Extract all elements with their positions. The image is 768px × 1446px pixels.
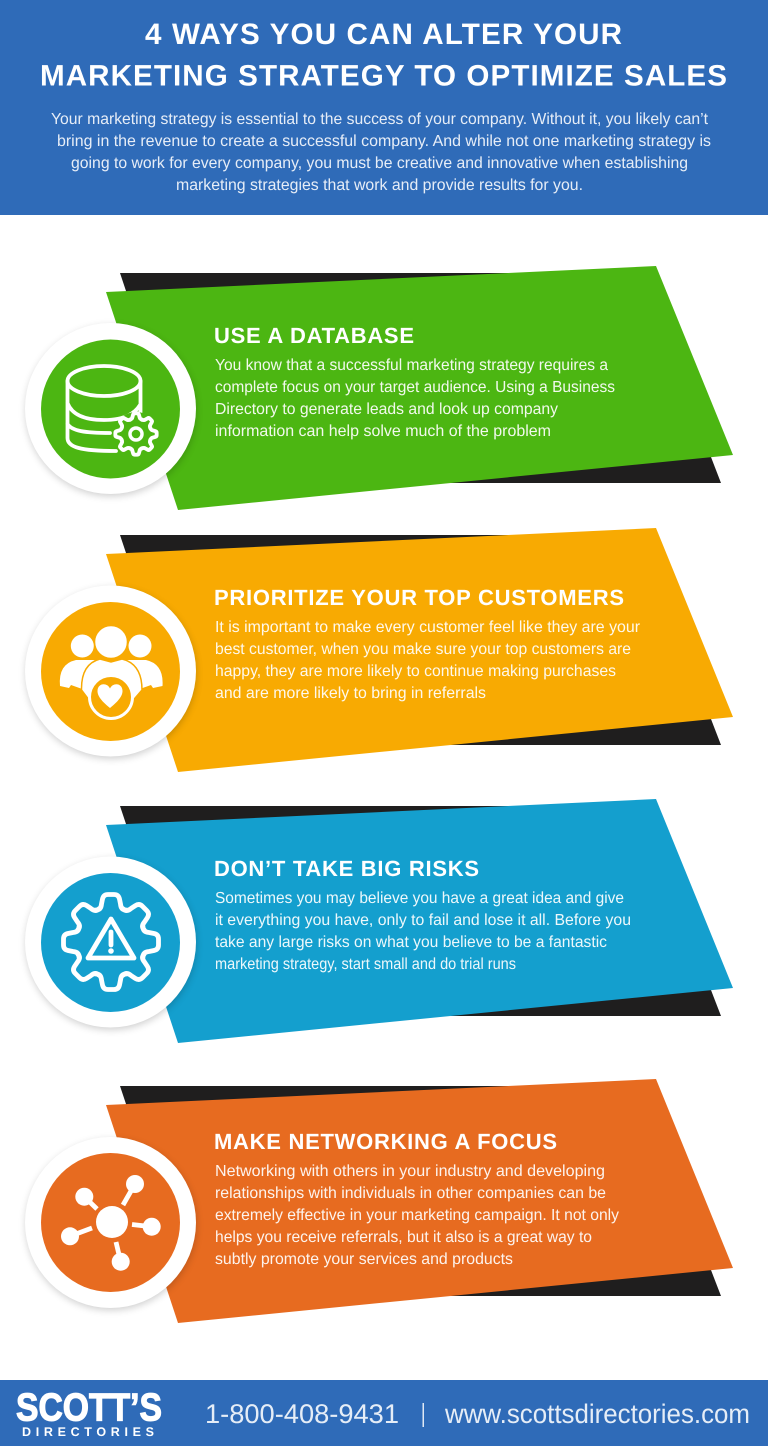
- intro paragraph: Your marketing strategy is essential to the success of your company. Without it, you likely can’t: [51, 111, 709, 128]
- title: [40, 18, 727, 92]
- body text: use a database: You know that a successful marketing strategy requires a: [215, 357, 608, 374]
- header banner: [0, 0, 768, 215]
- title: 4 WAYS YOU CAN ALTER YOUR: [145, 18, 622, 51]
- body text: use a database: information can help solve much of the problem: [215, 423, 551, 440]
- title: MARKETING STRATEGY TO OPTIMIZE SALES: [40, 60, 727, 92]
- intro paragraph: [51, 111, 711, 194]
- icon: database with gear: [68, 366, 158, 456]
- body text: use a database: Directory to generate leads and look up company: [215, 401, 558, 418]
- panel: don't take big risks: [25, 799, 733, 1043]
- intro paragraph: marketing strategies that work and provide results for you.: [176, 177, 583, 194]
- body text: don't take big risks: marketing strategy, start small and do trial runs: [215, 956, 516, 973]
- panel: prioritize your top customers: [25, 528, 733, 772]
- body text: make networking a focus: relationships with individuals in other companies can be: [215, 1185, 606, 1202]
- body text: make networking a focus: helps you receive referrals, but it also is a great way to: [215, 1229, 592, 1246]
- heading: prioritize your top customers: PRIORITIZE YOUR TOP CUSTOMERS: [214, 585, 624, 610]
- body text: prioritize your top customers: and are more likely to bring in referrals: [215, 685, 486, 702]
- intro paragraph: bring in the revenue to create a successful company. And while not one marketing strategy is: [57, 133, 711, 150]
- body text: don't take big risks: Sometimes you may believe you have a great idea and give: [215, 890, 624, 907]
- body text: use a database: [215, 357, 615, 440]
- body text: prioritize your top customers: It is important to make every customer feel like they are your: [215, 619, 641, 636]
- body text: don't take big risks: [215, 890, 631, 973]
- body text: don't take big risks: take any large risks on what you believe to be a fantastic: [215, 934, 607, 951]
- heading: use a database: USE A DATABASE: [214, 323, 414, 348]
- contact details: [205, 1399, 750, 1429]
- body text: make networking a focus: Networking with others in your industry and developing: [215, 1163, 605, 1180]
- contact details: 1-800-408-9431: [205, 1399, 399, 1429]
- body text: don't take big risks: it everything you have, only to fail and lose it all. Before you: [215, 912, 631, 929]
- body text: use a database: complete focus on your target audience. Using a Business: [215, 379, 615, 396]
- logo: Scott's Directories: DIRECTORIES: [22, 1425, 154, 1439]
- heading: make networking a focus: MAKE NETWORKING A FOCUS: [214, 1129, 557, 1154]
- logo: Scott's Directories: SCOTT’S: [16, 1386, 162, 1430]
- footer bar: [0, 1380, 768, 1446]
- body text: prioritize your top customers: [215, 619, 641, 702]
- body text: make networking a focus: extremely effective in your marketing campaign. It not only: [215, 1207, 619, 1224]
- icon: network nodes: [61, 1175, 161, 1271]
- intro paragraph: going to work for every company, you must be creative and innovative when establishing: [71, 155, 688, 172]
- body text: prioritize your top customers: happy, they are more likely to continue making purchases: [215, 663, 616, 680]
- icon: gear with warning triangle: [64, 894, 158, 990]
- panel: make networking a focus: [25, 1079, 733, 1323]
- heading: don't take big risks: DON’T TAKE BIG RISKS: [214, 856, 479, 881]
- panel: use a database: [25, 266, 733, 510]
- icon: customers with heart: [60, 626, 163, 718]
- contact details: www.scottsdirectories.com: [444, 1399, 750, 1429]
- body text: prioritize your top customers: best customer, when you make sure your top customers are: [215, 641, 631, 658]
- body text: make networking a focus: subtly promote your services and products: [215, 1251, 513, 1268]
- body text: make networking a focus: [215, 1163, 619, 1268]
